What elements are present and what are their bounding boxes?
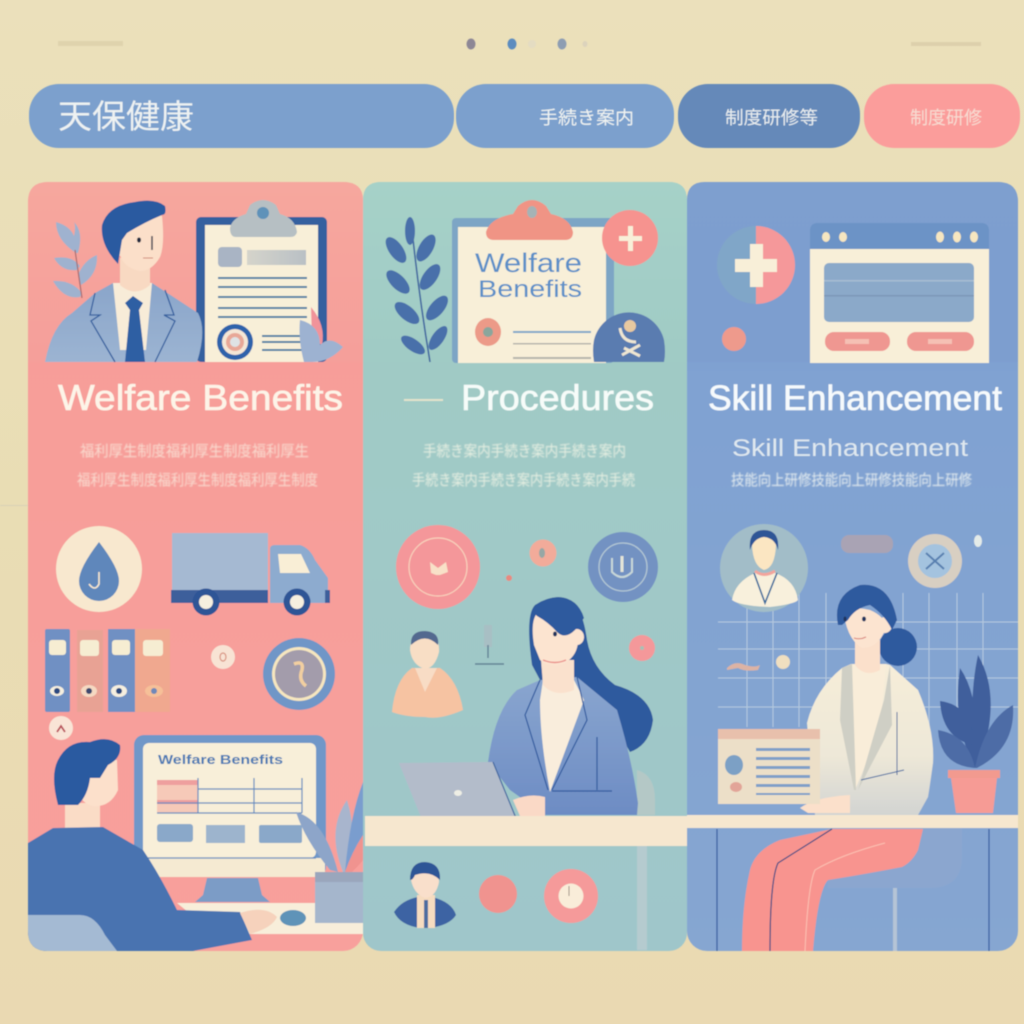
plant and pot (938, 655, 1013, 813)
clipboard: welfare benefits (452, 200, 614, 363)
icon: leaves (53, 222, 97, 298)
clipboard: welfare benefits: Benefits (478, 276, 582, 303)
person: small portrait (394, 862, 456, 928)
desk (365, 816, 687, 950)
icon: tiny dot (506, 575, 512, 581)
tab: third (678, 84, 860, 148)
text block: procedures description: 手続き案内手続き案内手続き案内 (423, 443, 626, 460)
icon: binders (45, 629, 170, 712)
icon: small pin (629, 635, 655, 661)
heading: skill enhancement: Skill Enhancement (708, 379, 1002, 418)
heading: welfare benefits: Welfare Benefits (58, 377, 343, 418)
icon: coral circle (396, 525, 480, 609)
person: woman with laptop (488, 597, 653, 816)
tab: main title (29, 84, 454, 148)
plant and pot (296, 782, 384, 923)
chair and desk legs (717, 828, 989, 951)
text block: welfare description: 福利厚生制度福利厚生制度福利厚生 (80, 443, 309, 460)
text block: procedures description: 手続き案内手続き案内手続き案内手続 (412, 472, 635, 489)
icon: crossed badge (908, 534, 962, 588)
icon: chair back (637, 770, 655, 815)
monitor with table (134, 735, 326, 902)
clipboard document (196, 200, 343, 362)
icon: small pin (49, 716, 73, 740)
clipboard: welfare benefits: Welfare (475, 248, 582, 278)
tab: fourth: 制度研修 (910, 108, 982, 128)
panel: skill enhancement (687, 182, 1018, 951)
icon: blue circle (588, 532, 658, 602)
tab: third: 制度研修等 (725, 108, 818, 128)
icon: coral dot (479, 875, 517, 913)
panel: welfare benefits (28, 182, 384, 951)
person: woman in cream jacket (800, 585, 933, 815)
icon: plus badge (717, 226, 795, 304)
pagination dots (466, 38, 588, 50)
icon: plus badge (602, 210, 658, 266)
grid background (718, 593, 1018, 727)
left edge line (0, 505, 28, 506)
faint mark top right (911, 42, 981, 46)
person: legs (742, 829, 923, 951)
icon: dark round badge (593, 312, 665, 362)
icon: heading dash (404, 399, 443, 401)
icon: portrait badge (720, 524, 808, 612)
tab: main title: 天保健康 (58, 98, 194, 135)
browser window (810, 223, 989, 363)
panel: procedures (363, 182, 687, 951)
document on desk (718, 729, 820, 804)
laptop (399, 762, 550, 827)
icon: small ring (530, 540, 556, 566)
icons: small marks on grid (727, 655, 790, 671)
icon: small pill (841, 535, 893, 553)
desk (177, 903, 363, 934)
subheading: skill enhancement: Skill Enhancement (732, 435, 968, 462)
tab: fourth (864, 84, 1020, 148)
text block: welfare description (77, 443, 318, 489)
person: seated figure (392, 631, 463, 718)
text block: skill description: 技能向上研修技能向上研修技能向上研修 (731, 472, 972, 489)
text block: procedures description (412, 443, 635, 489)
icon: microphone stand (475, 625, 504, 664)
icon: small drop mark (974, 535, 982, 547)
icon: small badge (211, 645, 235, 669)
person: man in suit (45, 201, 202, 362)
icon: round badge (263, 638, 335, 710)
icon: truck (171, 533, 330, 616)
text block: welfare description: 福利厚生制度福利厚生制度福利厚生制度 (77, 472, 318, 489)
icon: small coral dot (722, 327, 746, 351)
monitor with table: Welfare Benefits (158, 752, 283, 767)
icon: water drop (56, 526, 142, 612)
person: man at desk (28, 739, 306, 951)
faint mark top left (58, 41, 123, 46)
heading: procedures: Procedures (461, 377, 654, 418)
tab: second: 手続き案内 (539, 108, 634, 128)
desk (687, 815, 1018, 828)
icon: clock badge (544, 869, 598, 923)
tab: second (456, 84, 674, 148)
icon: leaf branch (382, 217, 452, 362)
